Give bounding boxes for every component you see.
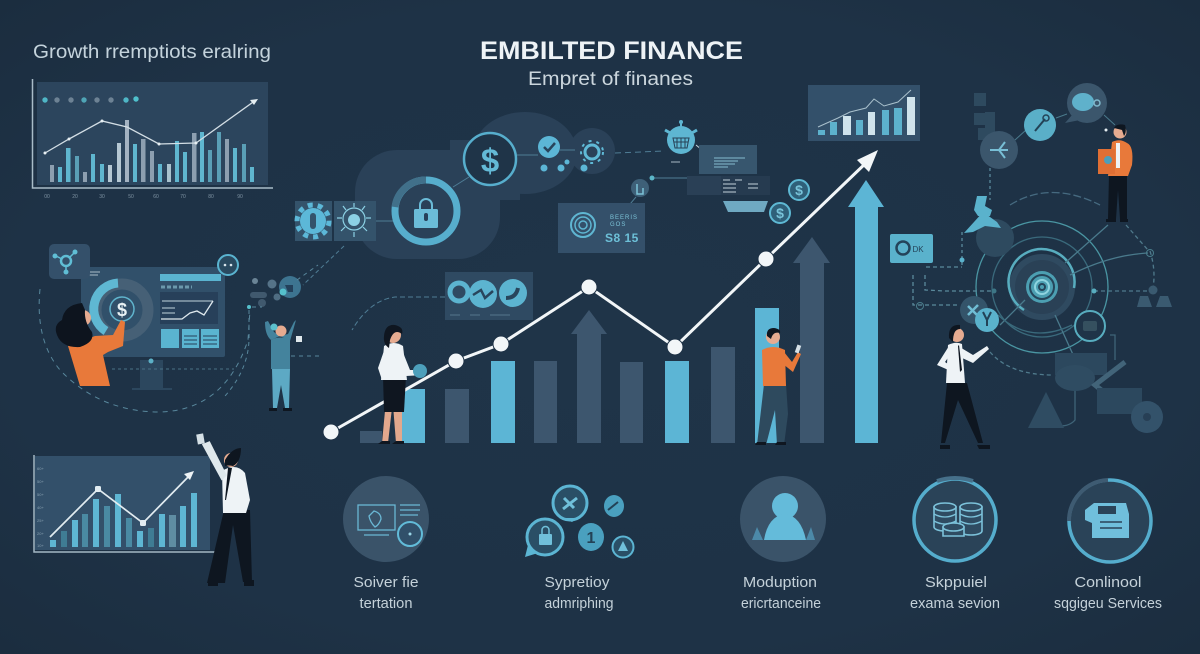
icon: key badge <box>1015 109 1115 141</box>
panel: top-right mini chart <box>808 85 920 141</box>
icon: dollar coins <box>770 180 809 223</box>
feature labels: Moduption <box>743 575 817 591</box>
icon: small gear <box>581 141 603 163</box>
person: man in orange holding card <box>1098 124 1132 222</box>
panel: top-left bar and line chart: 00 <box>44 194 50 200</box>
panel: bottom-left chart: 50+ <box>37 492 44 497</box>
main chart: bars <box>360 180 884 443</box>
panel: monitor dashboard: $ <box>117 300 127 320</box>
icon: basket <box>665 120 697 162</box>
subtitle: Empret of finanes <box>528 69 693 90</box>
icon: sun lightbulb tile <box>334 201 376 241</box>
panel: top-left bar and line chart: 80 <box>208 194 214 200</box>
panel: bottom-left chart <box>34 455 216 552</box>
panel: bottom-left chart: 20+ <box>37 531 44 536</box>
panel: target card: BEERIS <box>610 215 638 221</box>
panel: linked badges <box>445 272 533 320</box>
icon: cloud speech bubble <box>1065 83 1108 132</box>
panel: data card one <box>699 145 757 174</box>
main chart: growth line <box>323 150 878 440</box>
panel: bottom-left chart: 60+ <box>37 466 44 471</box>
icon: dollar coins: $ <box>795 182 803 198</box>
icon: dollar coins: $ <box>776 205 784 221</box>
feature labels: Soiver fie <box>354 575 418 591</box>
tile: status chip <box>890 234 933 263</box>
panel: monitor dashboard <box>39 267 250 412</box>
feature: speech-bubble cluster <box>525 486 634 558</box>
feature labels: exama sevion <box>910 596 1000 612</box>
panel: target card: S8 15 <box>605 231 639 245</box>
feature: speech-bubble cluster: 1 <box>587 530 596 547</box>
icon: podium pieces <box>1137 286 1172 307</box>
person: man in orange with phone <box>755 328 801 445</box>
panel: bottom-left chart: 40+ <box>37 505 44 510</box>
icon: robot badge <box>218 255 238 275</box>
person: bearded man at chart <box>196 433 254 586</box>
feature labels: Conlinool <box>1074 575 1142 591</box>
icon: dollar ring: $ <box>481 142 499 179</box>
icon: gear tile <box>295 201 332 241</box>
feature labels: admriphing <box>544 596 614 612</box>
tile: status chip: DK <box>912 245 924 254</box>
panel: top-left bar and line chart: 30 <box>99 194 105 200</box>
icon: runner figure <box>964 196 1014 257</box>
icon: molecule tile <box>49 244 90 279</box>
icon: tool badges <box>960 296 999 332</box>
feature labels: tertation <box>360 596 412 612</box>
panel: target card: GOS <box>610 222 626 228</box>
icon: share node <box>974 93 1018 169</box>
panel: bottom-left chart: 10+ <box>37 543 44 548</box>
cluster: faded workflow icons <box>1028 353 1163 433</box>
person: woman at monitor <box>56 303 125 386</box>
icon: target center <box>1026 271 1058 303</box>
network: connector lines <box>303 145 712 330</box>
icon: tray <box>723 201 768 212</box>
icon: lock ring <box>395 180 457 242</box>
feature labels: Sypretioy <box>544 575 610 591</box>
panel: top-left bar and line chart: 90 <box>237 194 243 200</box>
icon: dollar ring <box>464 133 516 185</box>
feature labels <box>354 575 1162 612</box>
panel: bottom-left chart: 50+ <box>37 479 44 484</box>
person: woman with tablet <box>378 325 427 444</box>
feature labels: Skppuiel <box>925 575 987 591</box>
person: man with raised arms <box>265 320 302 411</box>
feature labels: sqgigeu Services <box>1054 596 1162 612</box>
feature: badge one <box>343 476 429 562</box>
panel: top-left bar and line chart: 60 <box>153 194 159 200</box>
panel: top-left bar and line chart: 20 <box>72 194 78 200</box>
panel: top-left bar and line chart: 70 <box>180 194 186 200</box>
icon: camera ring <box>1075 311 1105 341</box>
right network: orbit rings <box>913 168 1154 426</box>
panel: data card two <box>687 176 770 195</box>
feature: document ring <box>1069 480 1151 562</box>
network: background blobs <box>355 112 615 259</box>
node: dot markers <box>916 250 1154 310</box>
icon: small link node <box>631 176 654 197</box>
panel: top-left bar and line chart: 50 <box>128 194 134 200</box>
feature labels: ericrtanceine <box>741 596 821 612</box>
feature: user badge <box>740 476 826 562</box>
icon: check badge <box>538 136 588 172</box>
panel: target card <box>558 203 645 253</box>
panel: top-left bar and line chart <box>32 79 273 200</box>
title: EMBILTED FINANCE <box>480 37 743 65</box>
panel: bottom-left chart: 25+ <box>37 518 44 523</box>
top-left heading: Growth rremptiots eralring <box>33 41 271 63</box>
feature: database ring <box>914 478 996 561</box>
icon: cluster nodes <box>225 265 320 396</box>
person: man in white shirt <box>937 325 990 449</box>
